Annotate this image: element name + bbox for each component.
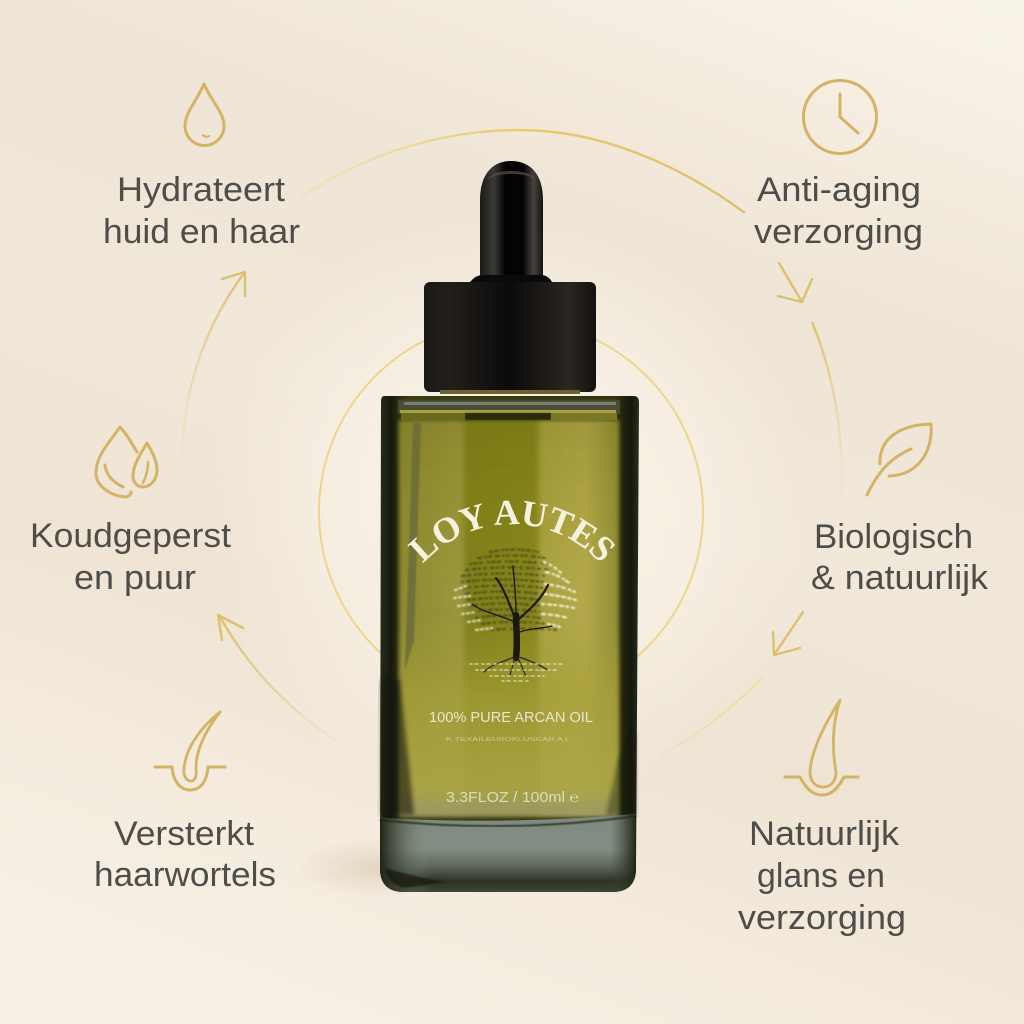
benefit: biologisch: [811, 424, 989, 597]
bottle: [378, 161, 639, 892]
icon: hair root: [155, 712, 225, 790]
benefit: anti-aging: [754, 80, 923, 251]
label: versterkt: Versterkt: [114, 815, 255, 853]
benefit: natuurlijk: [738, 700, 906, 937]
label: natuurlijk: Natuurlijk: [749, 815, 900, 853]
icon: drops: [96, 427, 157, 497]
benefit: hydrateert: [103, 84, 300, 251]
base glass: [380, 814, 636, 892]
label: biologisch: Biologisch: [814, 518, 973, 556]
label: anti-aging: Anti-aging: [757, 171, 921, 209]
volume: 3.3FLOZ / 100ml ℮: [446, 790, 579, 806]
bottle shadow: [295, 838, 455, 898]
arrow: bottom right arc: [660, 677, 763, 755]
label: hydrateert: huid en haar: [103, 213, 300, 251]
foliage: [454, 550, 576, 630]
icon: clock: [804, 80, 876, 154]
roots: [470, 657, 562, 681]
glass body: [380, 396, 639, 892]
cap: [424, 282, 596, 394]
brand arch: LOY AUTES: [407, 500, 615, 563]
glass neck rim: [398, 400, 620, 420]
tree logo: [454, 550, 576, 681]
inner ring: [319, 320, 703, 704]
label: natuurlijk: verzorging: [738, 899, 906, 937]
small print: K TEXAILEUBOKLUSCAR A L: [446, 737, 570, 743]
trunk and branches: [472, 566, 552, 658]
label: biologisch: & natuurlijk: [811, 559, 989, 597]
benefit: versterkt: [94, 712, 276, 894]
benefit: koudgeperst: [30, 427, 232, 597]
arrow: left arc: [181, 272, 245, 465]
icon: water drop: [185, 84, 224, 146]
label: koudgeperst: Koudgeperst: [30, 517, 232, 555]
dropper bulb: [470, 161, 552, 282]
label: koudgeperst: en puur: [74, 559, 196, 597]
product name: 100% PURE ARCAN OIL: [429, 710, 593, 726]
label: natuurlijk: glans en: [757, 857, 885, 895]
reflection stripe: [405, 423, 421, 670]
label: anti-aging: verzorging: [754, 213, 923, 251]
lower edge fades: [381, 680, 414, 815]
circular arrows: [181, 130, 842, 755]
arrow: top arc to anti-aging: [300, 130, 812, 302]
arrow: right arc to natural: [773, 322, 842, 655]
icon: leaf: [867, 424, 931, 495]
icon: hair strand: [785, 700, 858, 795]
arrow: bottom left arc: [218, 615, 335, 740]
oil shading: [400, 420, 618, 816]
label: versterkt: haarwortels: [94, 856, 276, 894]
label: hydrateert: Hydrateert: [117, 171, 286, 209]
oil: [399, 420, 619, 816]
